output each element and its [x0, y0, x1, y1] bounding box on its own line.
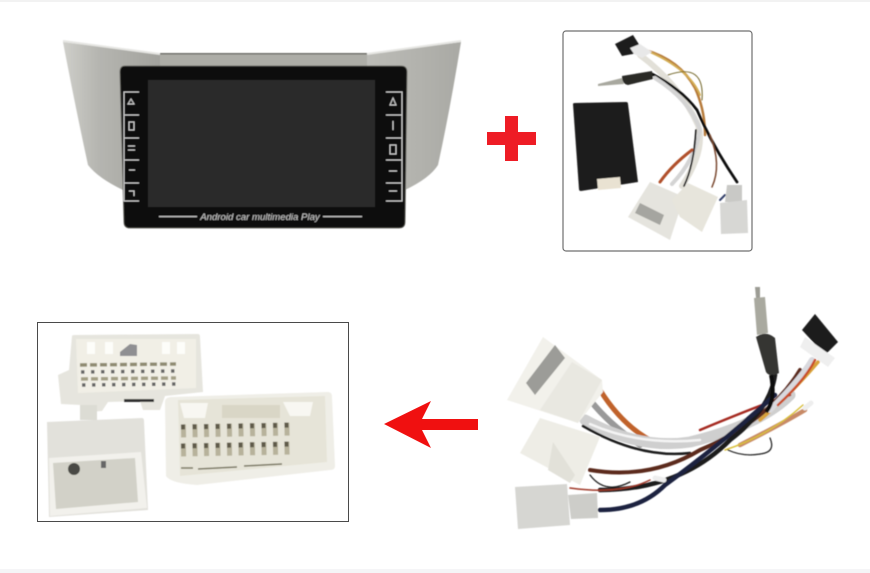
product caption: Android car multimedia Play	[199, 212, 321, 223]
connector: labelled plug	[507, 337, 603, 423]
left arrow	[384, 401, 478, 448]
connector: top 20-pin	[58, 334, 203, 412]
screen	[148, 80, 375, 207]
harness plugs	[598, 35, 748, 240]
panel: decoder and harness	[563, 31, 752, 251]
connector: middle plug	[520, 418, 600, 485]
wiring harness	[507, 287, 838, 529]
harness plug: black block	[800, 314, 838, 367]
panel: connector close-up	[38, 322, 348, 522]
harness wires	[640, 50, 737, 200]
connector: lower-left housing	[47, 405, 148, 517]
head unit: Android car multimedia player	[63, 41, 461, 228]
connector: right 22-pin	[165, 392, 335, 485]
harness wires	[570, 360, 818, 510]
black bezel	[120, 66, 407, 228]
antenna plug	[754, 287, 779, 412]
decoder box	[573, 102, 638, 191]
left buttons	[124, 92, 139, 201]
connector: lower grey plug	[515, 484, 598, 529]
silver fascia	[63, 41, 461, 190]
right buttons	[386, 92, 402, 201]
plus sign	[487, 116, 536, 161]
